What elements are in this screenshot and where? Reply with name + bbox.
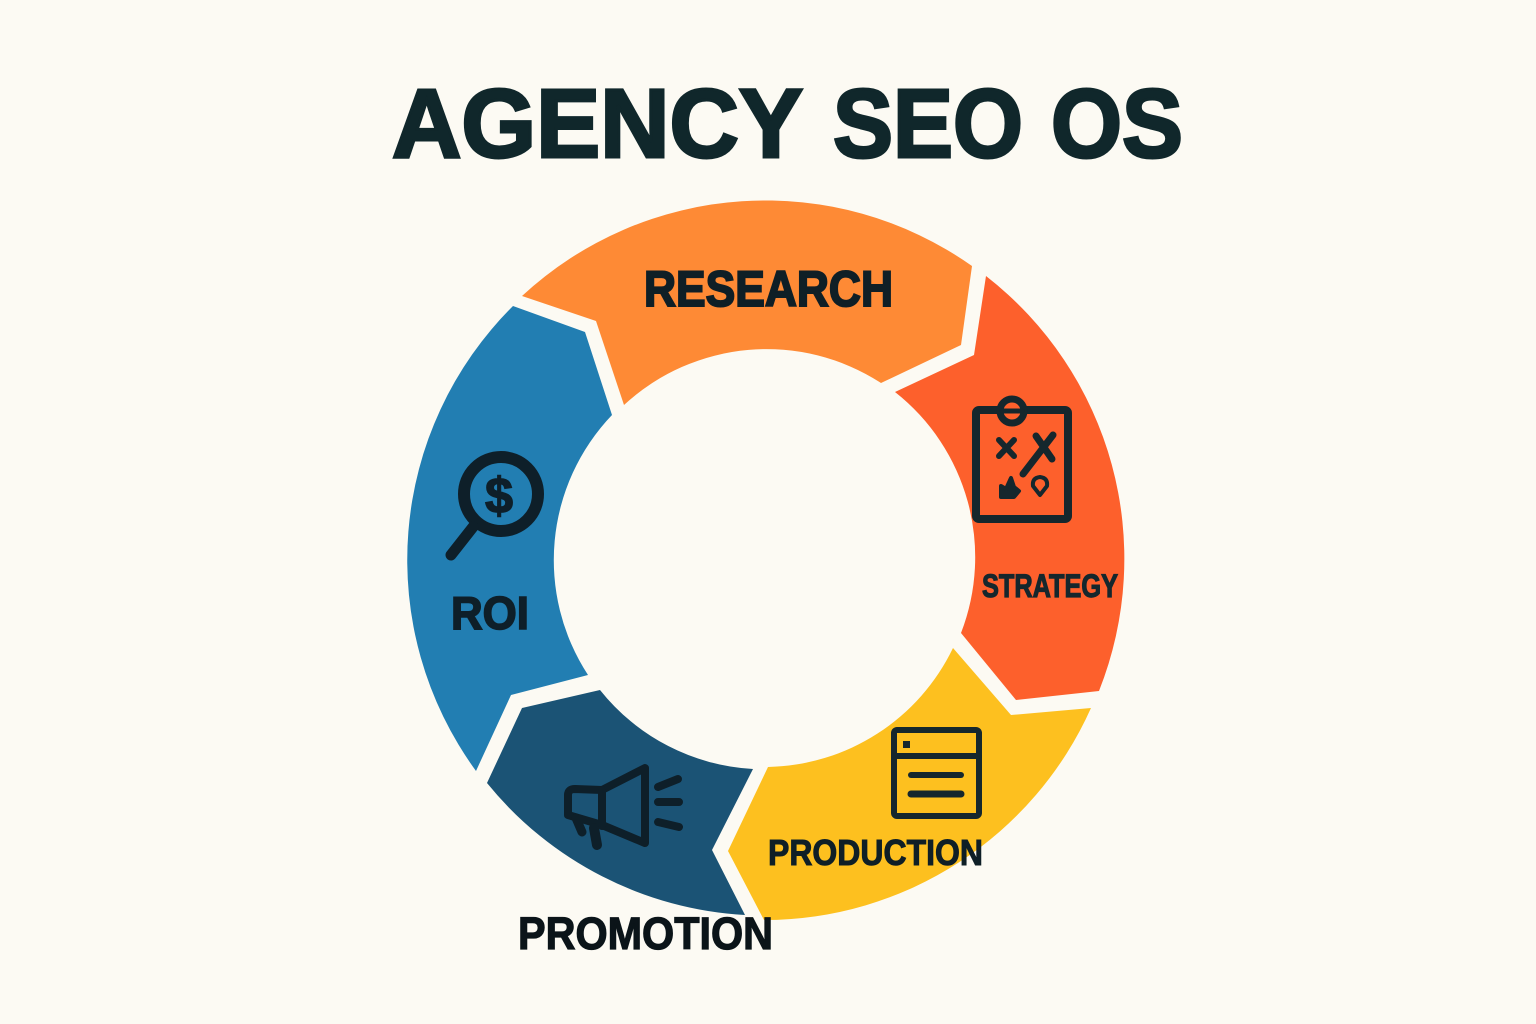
title xyxy=(392,69,1183,178)
label: production: PRODUCTION xyxy=(768,832,983,873)
title: OS xyxy=(1051,69,1183,178)
panel: production segment xyxy=(728,648,1091,920)
title: SEO xyxy=(833,69,1023,178)
icon: promotion megaphone xyxy=(568,768,679,845)
panel: roi segment xyxy=(407,306,612,771)
label: promotion: PROMOTION xyxy=(518,908,773,959)
label: research: RESEARCH xyxy=(644,261,893,317)
label: strategy: STRATEGY xyxy=(982,568,1118,604)
label: roi: ROI xyxy=(451,587,529,639)
cycle diagram xyxy=(407,200,1124,920)
icon: roi magnifier with dollar xyxy=(451,457,538,555)
panel: research segment xyxy=(522,200,972,405)
icon: strategy clipboard xyxy=(976,399,1068,519)
icon: production content window xyxy=(894,730,979,816)
panel: strategy segment xyxy=(895,276,1124,700)
panel: promotion segment xyxy=(487,690,753,915)
icon: roi magnifier with dollar: $ xyxy=(485,468,513,524)
title: AGENCY xyxy=(392,69,803,178)
